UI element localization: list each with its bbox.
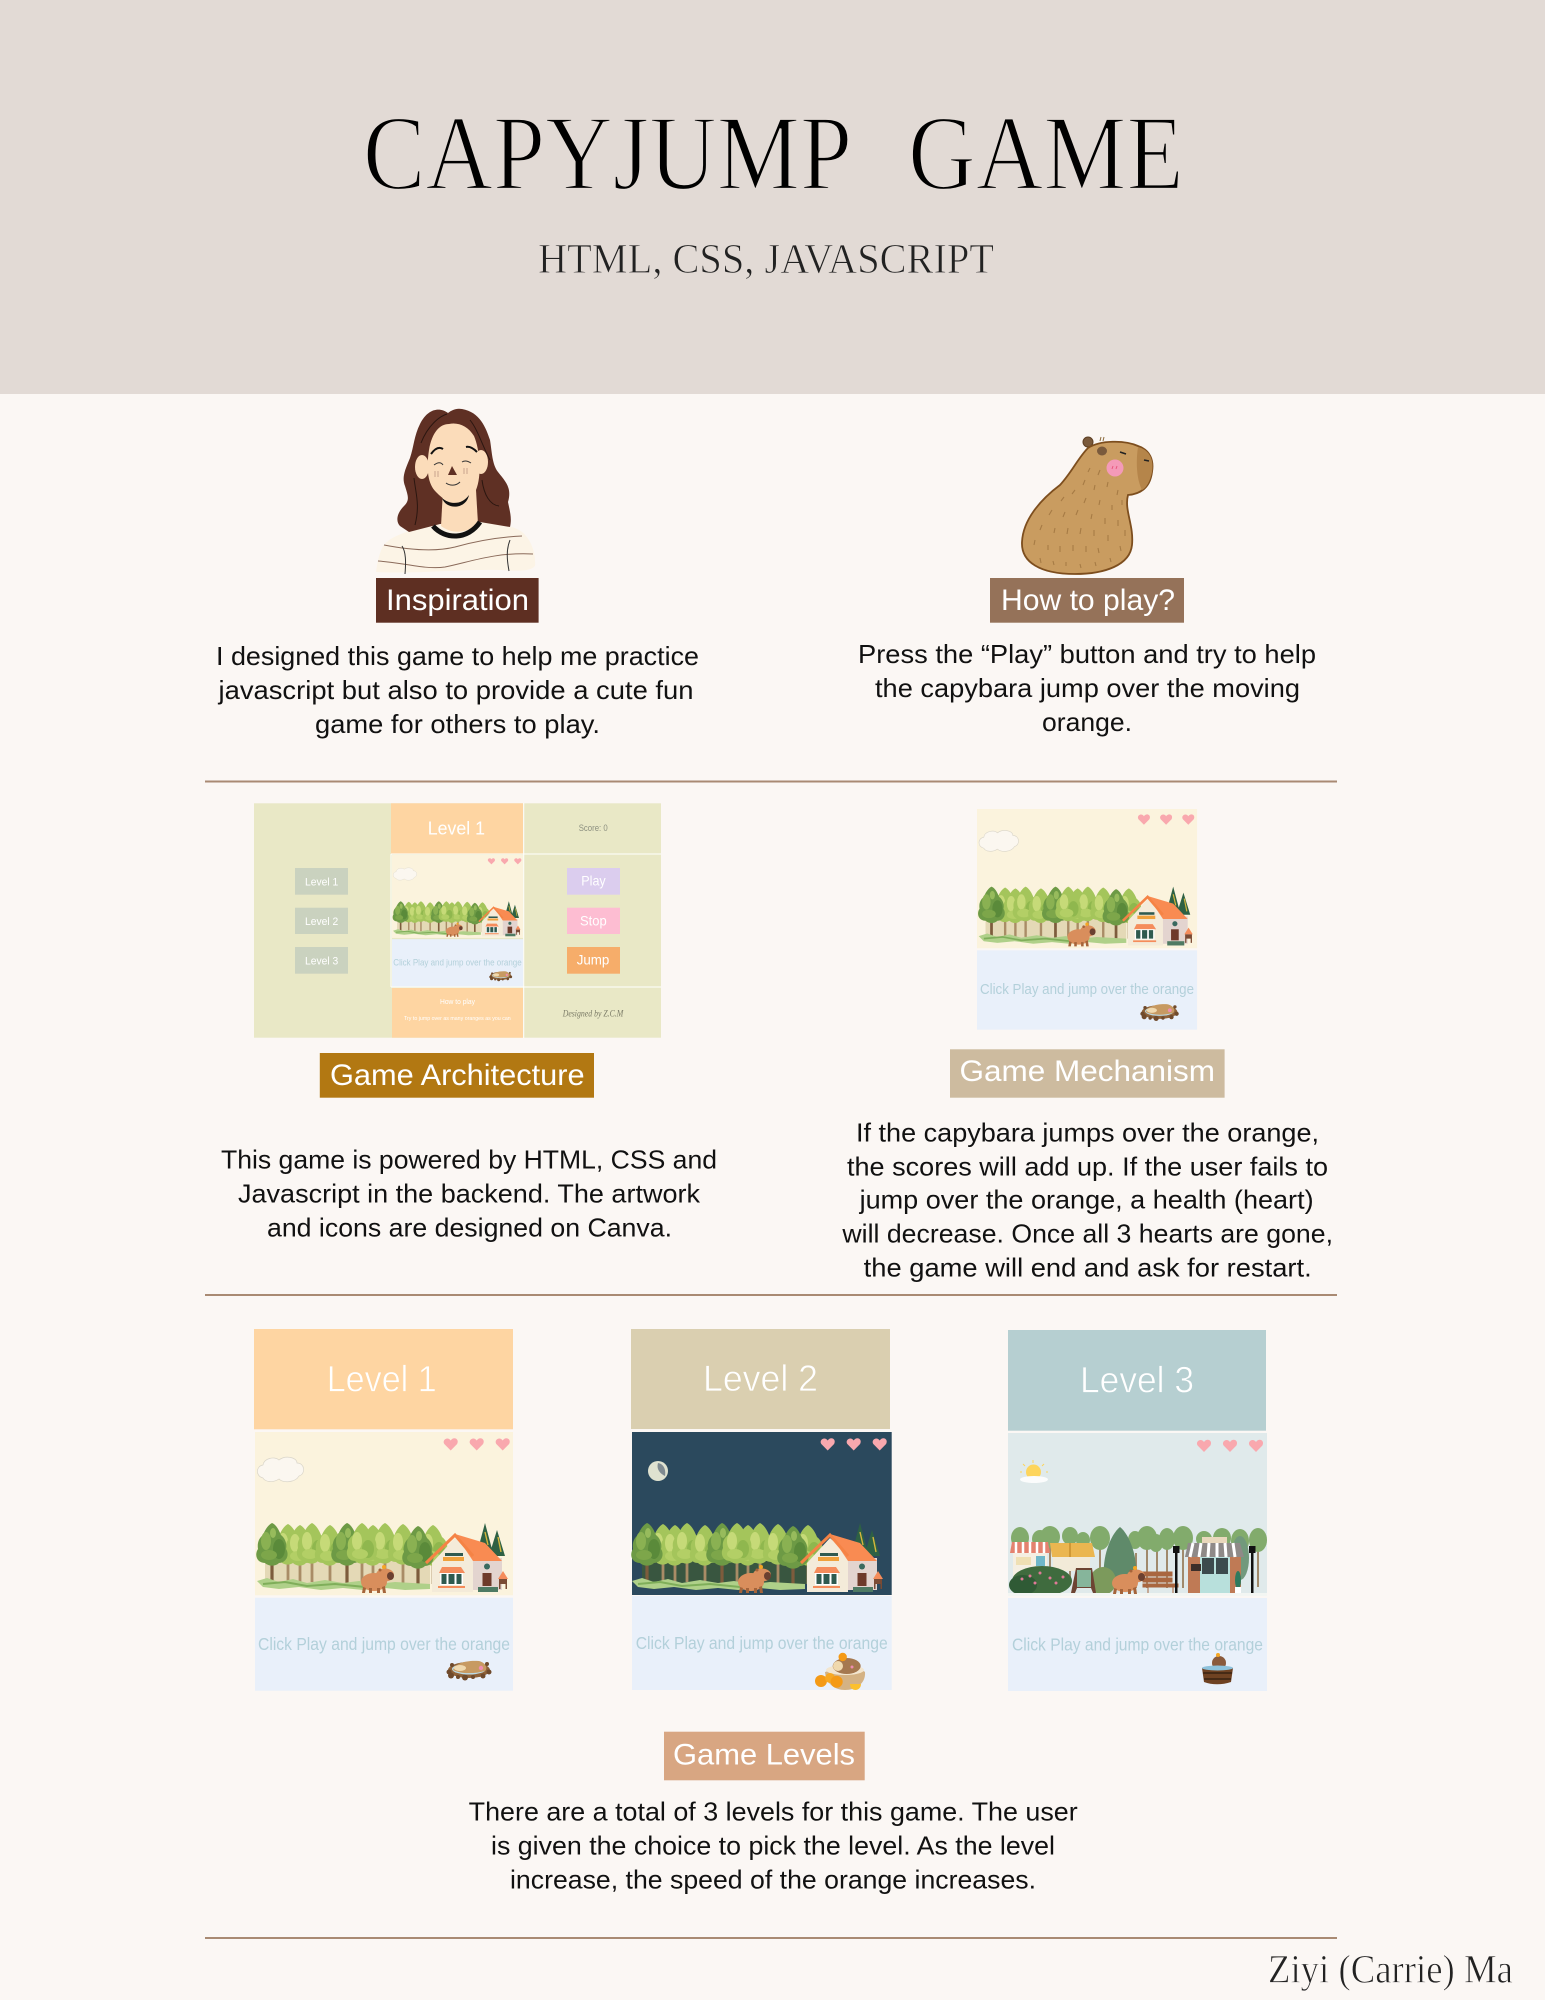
level 1 prompt: Click Play and jump over the orange [258,1634,510,1654]
subtitle: HTML, CSS, JAVASCRIPT [538,237,994,283]
icon: capybara in barrel [1202,1653,1233,1684]
game ui screenshot: Score: 0 [579,823,608,834]
game levels text: is given the choice to pick the level. As the level [491,1831,1055,1861]
author credit: Ziyi (Carrie) Ma [1268,1947,1513,1992]
how to play text [858,639,1316,737]
title: CAPYJUMP [363,93,852,212]
game ui screenshot: Click Play and jump over the orange [393,958,522,968]
inspiration text: I designed this game to help me practice [216,641,699,671]
icon: sun and cloud [1020,1460,1048,1483]
game ui screenshot: Stop [580,912,607,928]
header band [0,0,1545,394]
game ui screenshot: Jump [577,952,610,968]
title: GAME [908,93,1184,212]
level 3 scene [1008,1433,1267,1596]
divider 1 [205,780,1337,782]
level 2 prompt: Click Play and jump over the orange [636,1633,888,1653]
game ui screenshot: Designed by Z.C.M [562,1010,624,1020]
card: level 3 [1008,1330,1267,1691]
panel: game architecture [221,803,717,1242]
mechanism text: the scores will add up. If the user fails to [847,1151,1328,1181]
divider 3 [205,1937,1337,1939]
label: inspiration [376,578,539,623]
architecture text: Javascript in the backend. The artwork [238,1178,701,1208]
game ui screenshot [254,803,661,1038]
panel: game mechanism [841,809,1333,1282]
label: game mechanism [950,1049,1225,1098]
game levels text: There are a total of 3 levels for this game. The user [469,1797,1078,1827]
label: game architecture [320,1053,594,1098]
mechanism text [841,1118,1333,1282]
architecture text: and icons are designed on Canva. [267,1212,672,1242]
label: how to play [990,578,1184,623]
how to play text: the capybara jump over the moving [875,673,1300,703]
level 2 heading: Level 2 [703,1358,818,1399]
game levels text: increase, the speed of the orange increases. [510,1865,1036,1895]
game ui screenshot: Level 1 [305,876,338,888]
icon: capybara [1022,437,1152,574]
level scene screenshot: Click Play and jump over the orange [980,982,1194,998]
panel: inspiration [216,409,699,739]
label: inspiration: Inspiration [386,584,529,617]
label: game levels [664,1732,865,1780]
level 2 scene [631,1432,892,1595]
icon: girl portrait [376,409,535,574]
card: level 2 [631,1329,892,1690]
game ui screenshot: Try to jump over as many oranges as you can [404,1016,511,1022]
panel: how to play [858,437,1316,737]
label: game levels: Game Levels [673,1738,855,1771]
architecture text: This game is powered by HTML, CSS and [221,1144,717,1174]
game ui screenshot: Level 3 [305,955,338,967]
game ui screenshot: Level 2 [305,916,338,928]
inspiration text [216,641,699,739]
game levels text [469,1797,1078,1895]
mechanism text: will decrease. Once all 3 hearts are gone, [841,1218,1333,1248]
game ui screenshot: Level 1 [428,818,485,839]
label: game architecture: Game Architecture [330,1059,585,1092]
inspiration text: javascript but also to provide a cute fun [217,675,693,705]
icon: capybara in bowl with oranges [815,1653,865,1690]
how to play text: orange. [1042,707,1132,737]
level 1 heading: Level 1 [327,1359,437,1400]
how to play text: Press the “Play” button and try to help [858,639,1316,669]
mechanism text: the game will end and ask for restart. [864,1252,1312,1282]
level 1 scene [255,1432,513,1691]
level 3 prompt: Click Play and jump over the orange [1012,1635,1263,1655]
inspiration text: game for others to play. [315,709,600,739]
level 3 heading: Level 3 [1080,1360,1194,1401]
divider 2 [205,1294,1337,1296]
game ui screenshot: Play [581,872,606,888]
game ui screenshot: How to play [440,999,475,1006]
level scene screenshot [977,809,1197,1030]
architecture text [221,1144,717,1242]
label: how to play: How to play? [1001,584,1175,617]
card: level 1 [254,1329,513,1691]
mechanism text: If the capybara jumps over the orange, [856,1118,1319,1148]
label: game mechanism: Game Mechanism [960,1055,1215,1088]
mechanism text: jump over the orange, a health (heart) [859,1185,1314,1215]
